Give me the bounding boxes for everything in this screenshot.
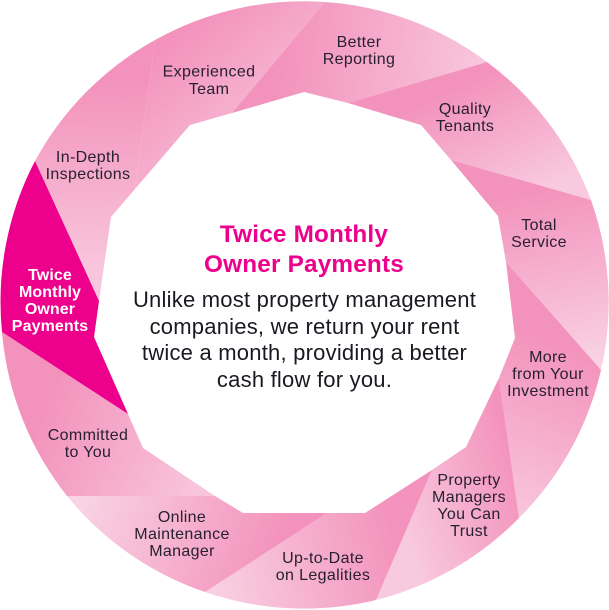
panel: Total Service segment: Service [511, 234, 567, 251]
panel: Property Managers You Can Trust segment: Managers [432, 489, 506, 506]
panel: Twice Monthly Owner Payments highlighted segment [0, 161, 128, 414]
panel: In-Depth Inspections segment: In-Depth [56, 149, 120, 166]
panel: Quality Tenants segment: Tenants [436, 118, 494, 135]
panel: Total Service segment: Total [521, 217, 557, 234]
panel: More from Your Investment segment: Investment [507, 383, 589, 400]
panel: Online Maintenance Manager segment: Online [158, 509, 206, 526]
text block: description: twice a month, providing a better [142, 340, 467, 365]
panel: Property Managers You Can Trust segment [376, 378, 519, 600]
panel: Quality Tenants segment: Quality [439, 101, 491, 118]
panel: More from Your Investment segment: from Your [512, 366, 584, 383]
panel: Experienced Team segment [135, 1, 325, 189]
panel: Online Maintenance Manager segment [67, 496, 327, 592]
panel: In-Depth Inspections segment [35, 40, 155, 301]
panel: Better Reporting segment: Reporting [323, 51, 395, 68]
panel: More from Your Investment segment: More [529, 349, 567, 366]
panel: In-Depth Inspections segment: Inspections [46, 166, 130, 183]
panel: Better Reporting segment: Better [337, 34, 382, 51]
text block: description: cash flow for you. [217, 367, 392, 392]
panel: Property Managers You Can Trust segment: Property [437, 472, 501, 489]
panel: Property Managers You Can Trust segment: You Can [437, 506, 501, 523]
panel: Quality Tenants segment [348, 62, 591, 200]
panel: Committed to You segment [2, 332, 215, 496]
panel: Up-to-Date on Legalities segment [205, 470, 432, 609]
panel: Twice Monthly Owner Payments highlighted segment: Payments [12, 318, 88, 335]
text block: description: Unlike most property management [133, 287, 476, 312]
panel: Experienced Team segment: Team [189, 81, 229, 98]
panel: Up-to-Date on Legalities segment: on Legalities [276, 567, 370, 584]
panel: Online Maintenance Manager segment: Manager [149, 543, 215, 560]
panel: Experienced Team segment: Experienced [163, 64, 255, 80]
panel: Better Reporting segment [232, 2, 487, 113]
panel: Total Service segment [451, 160, 609, 370]
text block: description: companies, we return your rent [150, 314, 459, 339]
text block: description [133, 287, 476, 392]
panel: Twice Monthly Owner Payments highlighted segment: Twice [28, 267, 72, 284]
panel: Up-to-Date on Legalities segment: Up-to-Date [282, 550, 364, 567]
panel: Committed to You segment: Committed [48, 427, 128, 444]
panel: Committed to You segment: to You [65, 444, 111, 461]
panel: Online Maintenance Manager segment: Maintenance [134, 526, 230, 543]
heading: Twice Monthly Owner Payments [204, 221, 404, 278]
panel: More from Your Investment segment [499, 262, 601, 518]
panel: Property Managers You Can Trust segment: Trust [450, 523, 488, 540]
panel: Twice Monthly Owner Payments highlighted segment: Monthly [19, 284, 81, 301]
heading: Twice Monthly Owner Payments: Owner Payments [204, 251, 404, 278]
heading: Twice Monthly Owner Payments: Twice Monthly [220, 221, 388, 248]
panel: Twice Monthly Owner Payments highlighted segment: Owner [25, 301, 75, 318]
